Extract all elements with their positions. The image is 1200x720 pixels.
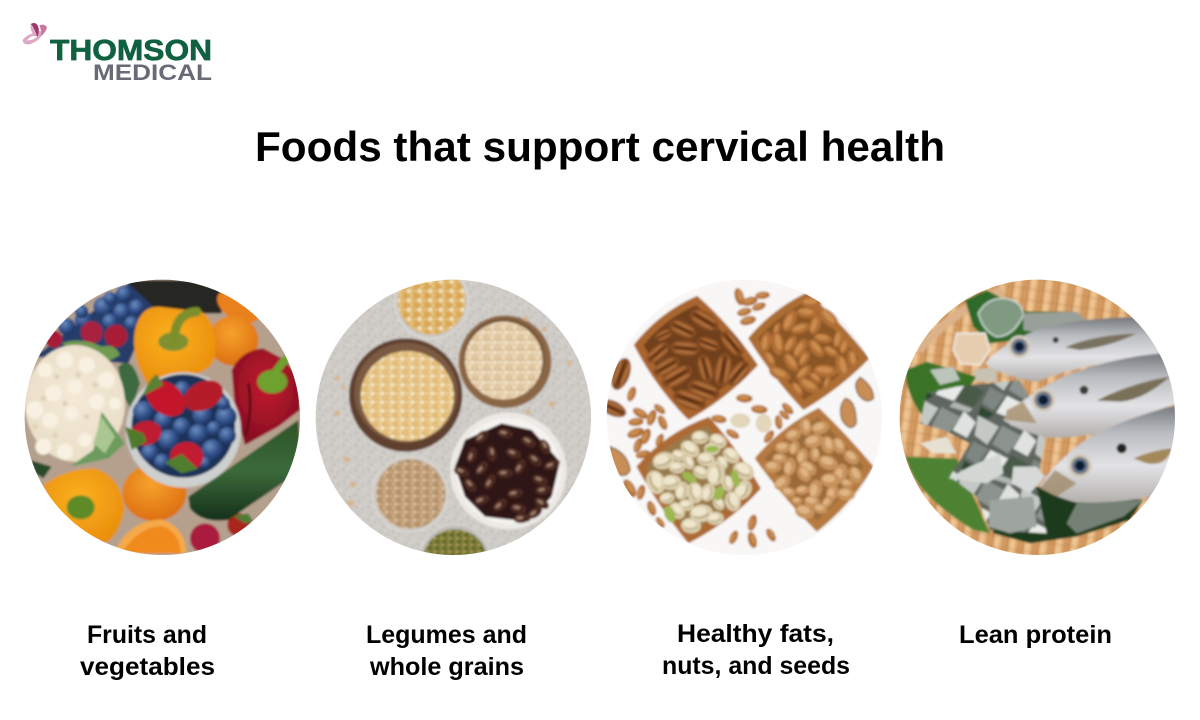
photo: nuts and seeds <box>606 280 882 555</box>
photo: fish on ice <box>900 280 1175 555</box>
title: Foods that support cervical health <box>255 123 945 170</box>
wordmark: MEDICAL: MEDICAL <box>93 60 212 85</box>
label: legumes and whole grains <box>366 621 527 681</box>
label: legumes and whole grains: whole grains <box>369 653 524 681</box>
label: fruits and vegetables: vegetables <box>80 653 215 681</box>
photo: legumes and whole grains <box>316 280 591 555</box>
label: healthy fats, nuts, and seeds: nuts, and seeds <box>662 652 850 680</box>
icon: butterfly heart <box>23 23 47 44</box>
panel: legumes and whole grains <box>316 280 591 680</box>
label: healthy fats, nuts, and seeds: Healthy fats, <box>677 620 834 648</box>
panel: lean protein <box>890 270 1185 649</box>
logo: Thomson Medical <box>23 23 212 85</box>
label: healthy fats, nuts, and seeds <box>662 620 850 680</box>
label: fruits and vegetables <box>80 621 215 681</box>
label: legumes and whole grains: Legumes and <box>366 621 527 649</box>
photo: fruits and vegetables <box>24 280 300 555</box>
wordmark: THOMSON: THOMSON <box>50 35 212 67</box>
panel: fruits and vegetables <box>15 270 310 681</box>
label: lean protein: Lean protein <box>959 621 1112 649</box>
label: fruits and vegetables: Fruits and <box>87 621 207 649</box>
panel: healthy fats, nuts, and seeds <box>597 270 892 680</box>
